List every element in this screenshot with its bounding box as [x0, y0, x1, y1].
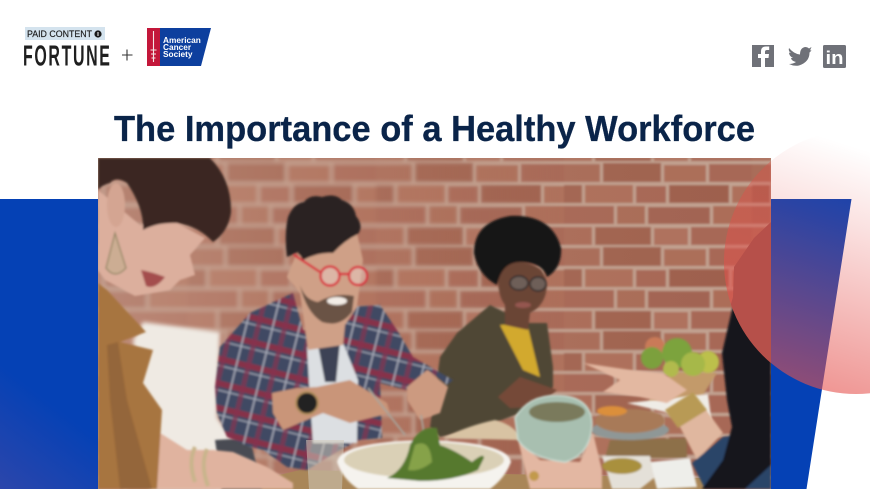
right hand [407, 370, 448, 420]
salad servers [366, 386, 426, 435]
plate of food [591, 420, 669, 440]
white napkin [627, 394, 712, 425]
mouth [141, 270, 165, 287]
icon: LinkedIn [823, 45, 846, 68]
person: woman in olive jacket [430, 216, 561, 437]
table surface [220, 470, 705, 489]
smile [327, 297, 347, 305]
tan jacket [98, 283, 162, 489]
logo wordmark: Society [163, 49, 193, 59]
Fortune logo: FORTUNE [23, 39, 110, 72]
icon: Twitter [789, 47, 812, 66]
black hair [702, 297, 771, 489]
hand [498, 377, 557, 408]
neck and face [498, 262, 547, 330]
bowl interior [344, 442, 504, 478]
rings [529, 471, 539, 481]
sword mark [150, 31, 156, 62]
curry [602, 458, 642, 474]
white paper [650, 458, 697, 489]
patterned sleeve [692, 430, 771, 489]
mixed food [595, 409, 665, 433]
beard [300, 285, 354, 324]
blue block [160, 28, 211, 66]
icon: Facebook [752, 45, 774, 67]
orange vegetables [597, 406, 627, 416]
woven mat [605, 438, 687, 458]
lips [515, 302, 531, 308]
bowl rim [337, 440, 511, 489]
title: The Importance of a Healthy Workforce [114, 108, 755, 149]
dark placket [318, 342, 340, 382]
tag label: PAID CONTENT [27, 29, 92, 40]
afro hair [474, 216, 561, 285]
white bench [130, 320, 233, 489]
arm and hand [272, 380, 390, 430]
left blue panel [0, 199, 98, 489]
table spread [443, 394, 712, 489]
bread [443, 420, 522, 440]
hand [518, 433, 602, 489]
olive jacket [430, 305, 553, 437]
plaid jacket [215, 293, 453, 470]
white shirt [307, 343, 358, 443]
American Cancer Society logo [147, 28, 211, 66]
translucent pink circle [724, 130, 870, 394]
gold bangle [665, 392, 707, 428]
person: man in plaid jacket [215, 196, 453, 470]
teal glass [515, 395, 592, 462]
photo: coworkers sharing a healthy meal [98, 158, 771, 489]
hair seen through circle [725, 222, 771, 380]
brick wall [98, 158, 771, 489]
dark collar shadow [107, 342, 152, 489]
bracelets [192, 447, 208, 486]
logo wordmark: Cancer [163, 42, 192, 52]
neck and face [287, 233, 363, 350]
salad bowl [337, 428, 511, 489]
glass and holding hand [515, 395, 602, 489]
short dark hair [98, 158, 231, 242]
pointing hand [583, 363, 687, 403]
info icon [94, 30, 102, 38]
food reflected in glass [529, 402, 585, 422]
fruit basket [641, 337, 719, 404]
face [98, 190, 205, 296]
logo wordmark: American [163, 35, 201, 45]
wristwatch [296, 392, 318, 414]
yellow blouse [500, 323, 540, 377]
person: woman in tan jacket [98, 158, 293, 489]
water glass [306, 440, 344, 489]
plus sign [122, 50, 132, 60]
small bowl [602, 456, 654, 489]
bare arm and hand [157, 433, 293, 489]
icon: LinkedIn: in [826, 48, 844, 68]
tag background [25, 27, 105, 40]
ear [107, 183, 125, 227]
person: woman with long black hair [583, 297, 771, 489]
photo tint inside circle [98, 158, 771, 489]
dark chair [215, 438, 262, 489]
paid content tag [25, 27, 105, 40]
earring [106, 233, 126, 274]
red block [147, 28, 160, 66]
basket [647, 372, 717, 404]
curly hair [286, 196, 361, 260]
glasses [510, 276, 546, 291]
apples [645, 337, 665, 357]
forearm [665, 392, 723, 460]
salad greens [387, 428, 484, 481]
right blue slanted panel [771, 199, 852, 489]
red glasses [294, 255, 367, 286]
